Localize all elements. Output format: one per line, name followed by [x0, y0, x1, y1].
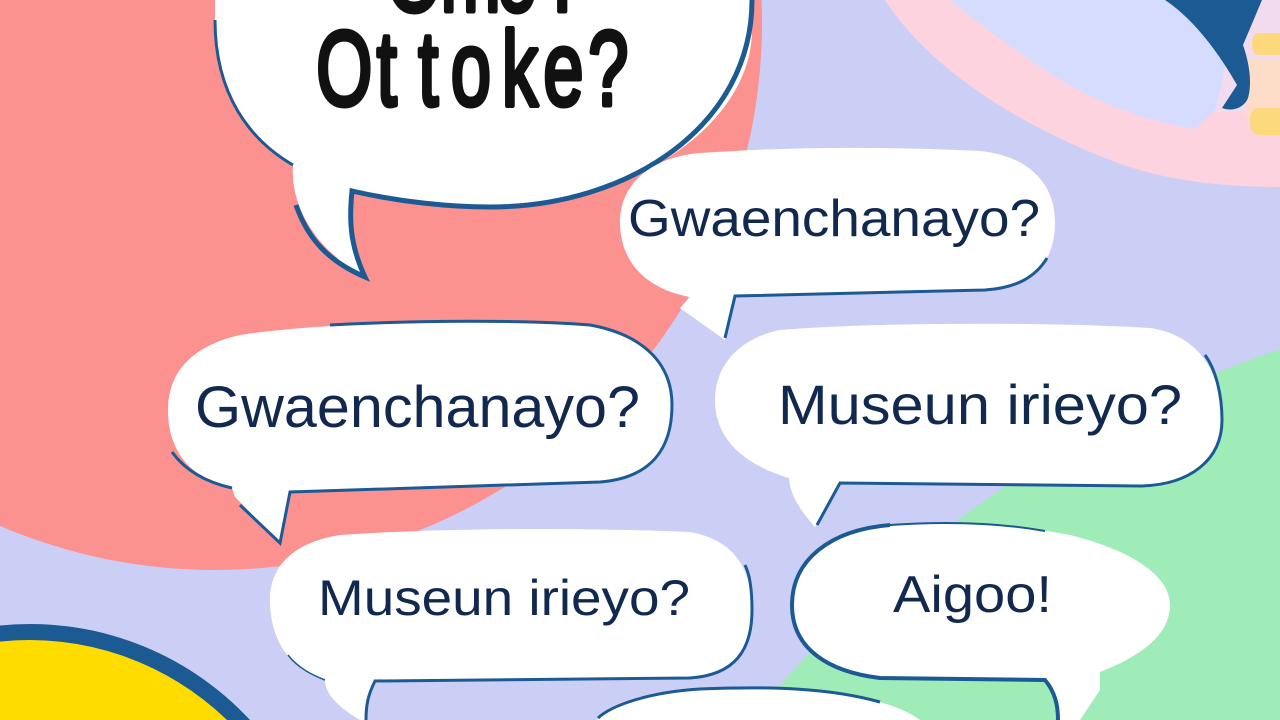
text: Museun irieyo?	[778, 373, 1182, 436]
speech bubble: Museun irieyo? right	[715, 324, 1222, 527]
speech bubble: Gwaenchanayo? left	[168, 321, 672, 543]
red circle	[0, 0, 762, 570]
speech bubble: Aigoo!	[790, 523, 1170, 720]
speech bubble: bottom, cut off	[597, 688, 920, 720]
text: Museun irieyo?	[318, 570, 690, 626]
text: Ottoke?: Ottoke?	[316, 10, 628, 128]
text: Gwaenchanayo?	[628, 190, 1040, 248]
speech bubble: Museun irieyo? bottom	[270, 529, 752, 720]
yellow circle	[0, 624, 250, 720]
green circle	[751, 349, 1280, 720]
decoration: top right plate	[885, 0, 1280, 187]
speech bubble: Gwaenchanayo? top	[620, 148, 1055, 340]
text: Aigoo!	[893, 566, 1052, 624]
text: Gwaenchanayo?	[195, 375, 640, 440]
speech bubble: Omo? Ottoke?	[215, 0, 752, 277]
